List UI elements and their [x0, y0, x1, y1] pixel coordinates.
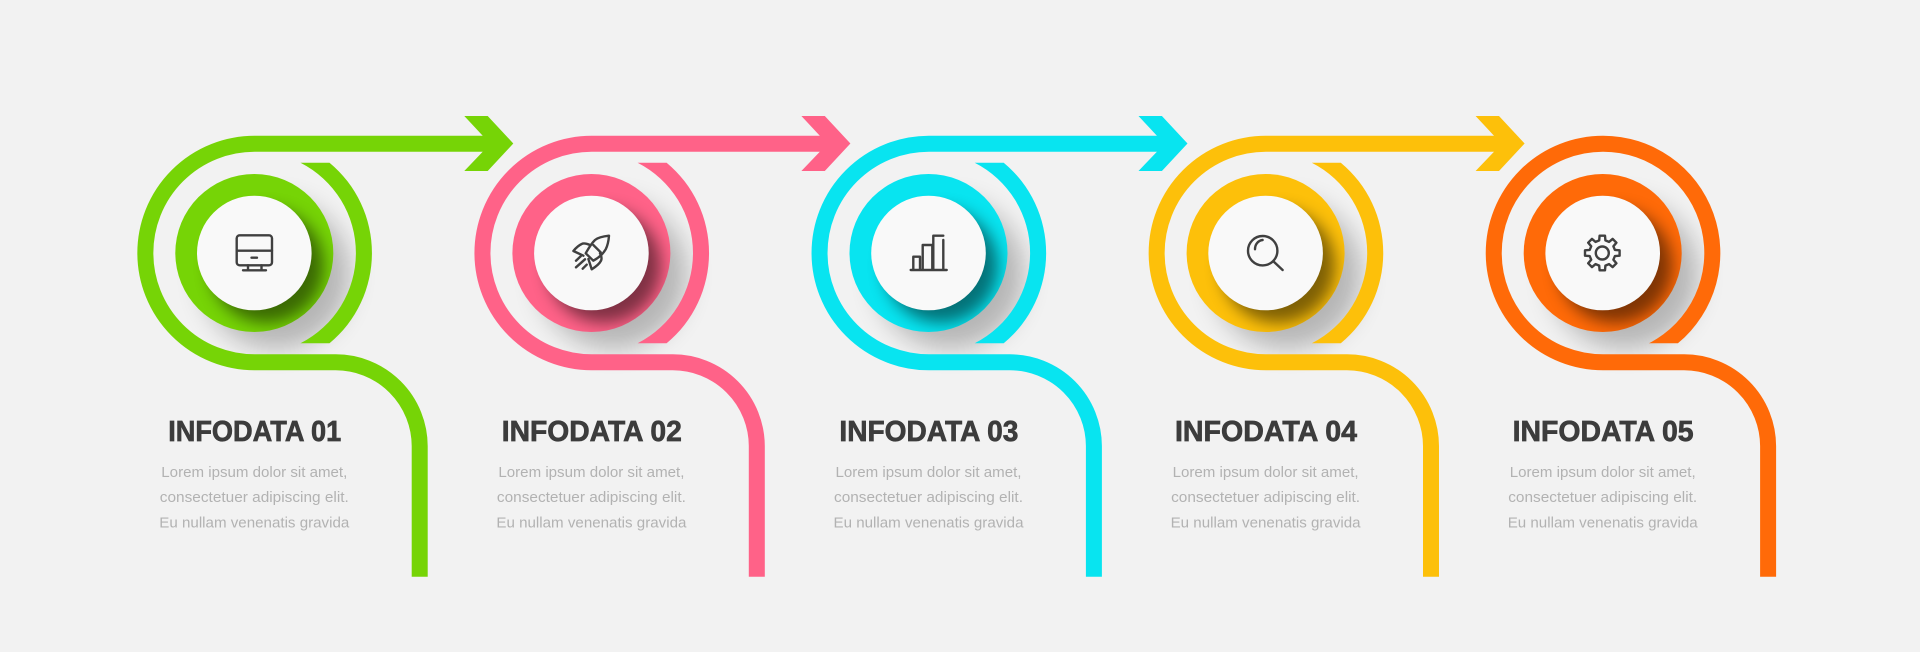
body text: step 2: consectetuer adipiscing elit. [497, 489, 686, 506]
panel: step 3 [820, 116, 1188, 577]
white disc: step 4 [1208, 196, 1323, 310]
white disc: step 5 [1545, 196, 1660, 310]
connector path with arrow: step 3 [820, 116, 1188, 577]
body text: step 3: Eu nullam venenatis gravida [834, 514, 1024, 531]
white disc: step 2 [534, 196, 649, 310]
panel: step 1 [145, 116, 513, 577]
heading: step 3: INFODATA 03 [839, 416, 1018, 448]
heading: step 2: INFODATA 02 [502, 416, 682, 448]
body text: step 4: Lorem ipsum dolor sit amet, [1173, 464, 1359, 481]
heading: step 1: INFODATA 01 [168, 416, 341, 448]
body text: step 5 [1508, 464, 1698, 531]
body text: step 2 [496, 464, 687, 531]
colored ring: step 4 [1187, 174, 1345, 332]
heading: step 5: INFODATA 05 [1513, 416, 1694, 448]
white disc: step 1 [197, 196, 312, 310]
body text: step 2: Lorem ipsum dolor sit amet, [498, 464, 684, 481]
body text: step 3: Lorem ipsum dolor sit amet, [836, 464, 1022, 481]
icon: magnifier [1248, 236, 1283, 270]
white disc: step 3 [871, 196, 986, 310]
right arc: step 3 [975, 163, 1046, 343]
connector path: step 5 [1494, 144, 1768, 577]
body text: step 1 [159, 464, 350, 531]
right arc joined to top: step 5 [1603, 136, 1720, 343]
icon: bar chart [911, 236, 947, 270]
body text: step 1: consectetuer adipiscing elit. [160, 489, 349, 506]
right arc: step 2 [638, 163, 709, 343]
icon: monitor [237, 235, 272, 270]
body text: step 1: Lorem ipsum dolor sit amet, [161, 464, 347, 481]
body text: step 1: Eu nullam venenatis gravida [159, 514, 350, 531]
panel: step 5 [1494, 136, 1768, 577]
panel: step 2 [482, 116, 850, 577]
colored ring: step 5 [1524, 174, 1682, 332]
colored ring: step 2 [512, 174, 670, 332]
heading: step 4: INFODATA 04 [1175, 416, 1357, 448]
right arc: step 1 [300, 163, 372, 343]
icon: gear [1585, 236, 1620, 270]
connector path with arrow: step 4 [1157, 116, 1525, 577]
body text: step 3 [834, 464, 1024, 531]
colored ring: step 3 [850, 174, 1008, 332]
right arc: step 4 [1312, 163, 1383, 343]
icon: rocket [573, 236, 609, 269]
colored ring: step 1 [175, 174, 333, 332]
connector path with arrow: step 2 [482, 116, 850, 577]
body text: step 4: consectetuer adipiscing elit. [1171, 489, 1360, 506]
panel: step 4 [1157, 116, 1525, 577]
body text: step 4: Eu nullam venenatis gravida [1171, 514, 1361, 531]
body text: step 4 [1171, 464, 1361, 531]
body text: step 2: Eu nullam venenatis gravida [496, 514, 687, 531]
body text: step 5: Lorem ipsum dolor sit amet, [1510, 464, 1696, 481]
body text: step 5: consectetuer adipiscing elit. [1508, 489, 1697, 506]
body text: step 3: consectetuer adipiscing elit. [834, 489, 1023, 506]
body text: step 5: Eu nullam venenatis gravida [1508, 514, 1698, 531]
connector path with arrow: step 1 [145, 116, 513, 577]
